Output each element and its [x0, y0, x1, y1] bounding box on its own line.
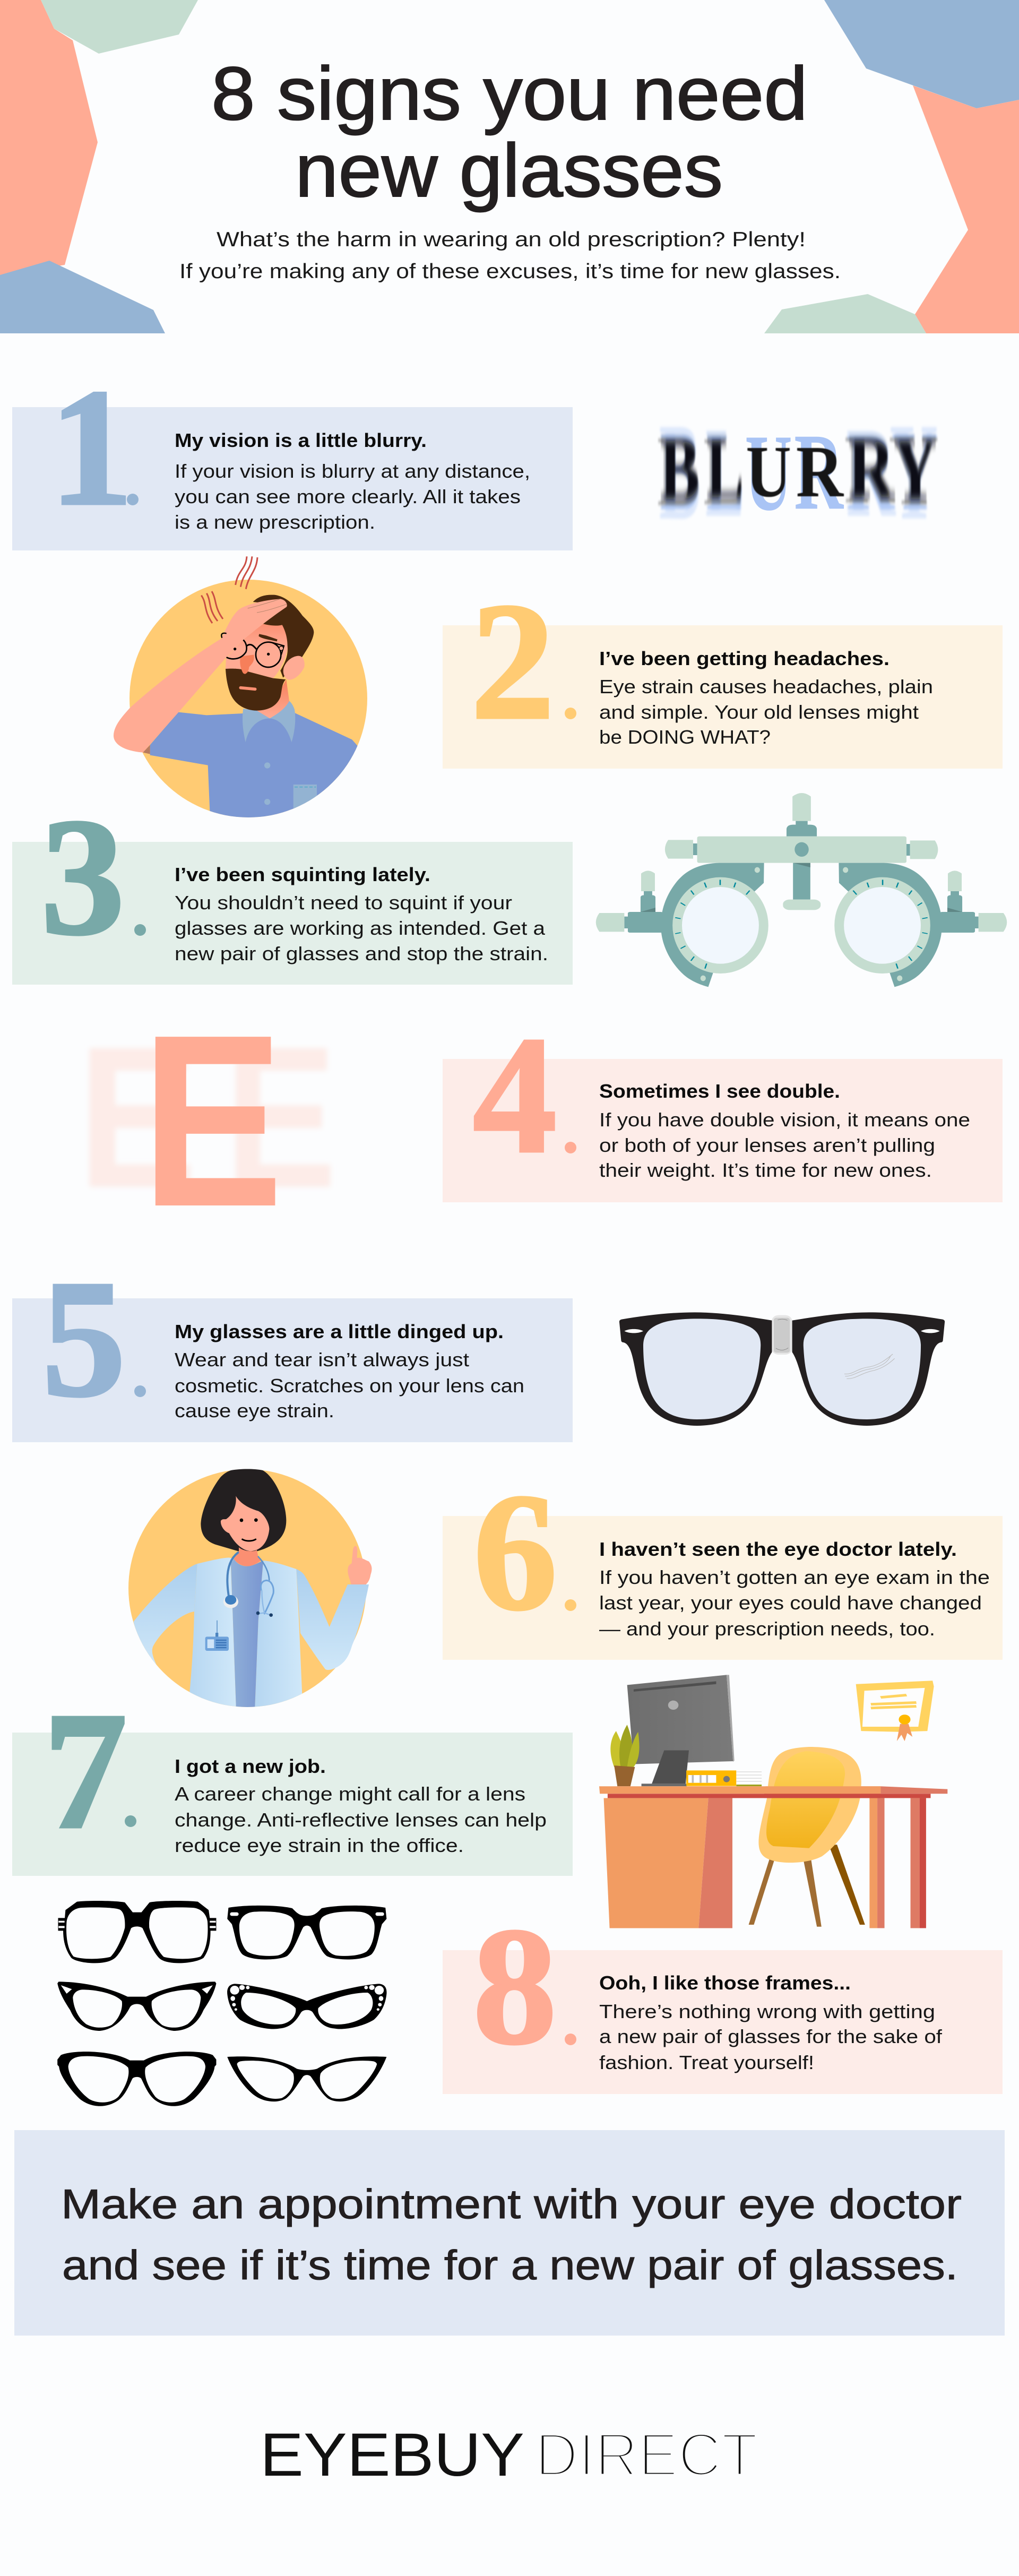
title: new glasses	[295, 128, 723, 213]
illustration: six eyeglass frames	[57, 1901, 387, 2106]
yellow circle	[129, 580, 367, 817]
text 1	[175, 429, 530, 533]
number 2: 2	[471, 568, 555, 754]
text 6: If you haven’t gotten an eye exam in the	[599, 1566, 990, 1588]
icon: scratch	[844, 1354, 895, 1379]
logo	[260, 2421, 758, 2489]
illustration: blurry text: R	[844, 415, 895, 524]
desk	[599, 1786, 947, 1928]
header	[0, 0, 1019, 333]
panel 2: headaches	[443, 568, 1003, 769]
illustration: blurry text: R	[796, 431, 844, 513]
monitor	[627, 1675, 735, 1786]
panel 4: double vision	[443, 1002, 1003, 1202]
text 5: cause eye strain.	[175, 1400, 334, 1421]
illustration: blurry text: B	[660, 408, 700, 535]
illustration: phoropter	[596, 793, 1007, 987]
illustration: blurry text: B	[659, 394, 701, 549]
illustration: blurry text: R	[794, 411, 844, 532]
illustration: blurry text: U	[746, 431, 791, 513]
frame 1	[58, 1901, 216, 1963]
number 1: 1	[49, 355, 133, 540]
number 3: 3	[41, 784, 125, 970]
text 8: fashion. Treat yourself!	[599, 2052, 814, 2073]
text 2: be DOING WHAT?	[599, 726, 771, 748]
text 3: You shouldn’t need to squint if your	[175, 892, 512, 914]
call to action text: Make an appointment with your eye doctor	[61, 2181, 962, 2227]
number 8: 8	[473, 1893, 557, 2079]
illustration: blurry text: R	[846, 409, 895, 535]
illustration: office desk	[599, 1675, 947, 1928]
text 4	[599, 1080, 970, 1181]
logo: EYEBUY	[260, 2421, 524, 2489]
text 6	[599, 1538, 990, 1640]
panel 1: blurry vision	[12, 355, 573, 550]
illustration: blurry text: L	[706, 420, 744, 516]
frame 3	[57, 1981, 216, 2031]
text 2: I’ve been getting headaches.	[599, 648, 890, 669]
text 3: I’ve been squinting lately.	[175, 864, 430, 885]
frame 6	[227, 2056, 386, 2101]
illustration: blurry text: R	[846, 401, 896, 544]
text 7: A career change might call for a lens	[175, 1783, 525, 1805]
text 6: I haven’t seen the eye doctor lately.	[599, 1538, 957, 1560]
subtitle	[179, 228, 841, 283]
illustration: man with headache	[114, 556, 372, 828]
call to action panel	[14, 2130, 1005, 2336]
panel 6: eye doctor	[443, 1459, 1003, 1660]
illustration: blurry text: L	[705, 401, 744, 544]
text 8: There’s nothing wrong with getting	[599, 2001, 935, 2022]
header decorative shapes	[0, 0, 1019, 333]
text 2: and simple. Your old lenses might	[599, 701, 919, 723]
frame 4	[227, 1984, 387, 2029]
text 7: reduce eye strain in the office.	[175, 1834, 464, 1856]
text 4: their weight. It’s time for new ones.	[599, 1159, 932, 1181]
illustration: double vision E: E	[141, 984, 283, 1257]
illustration: blurry text: L	[706, 409, 744, 535]
text: Y	[890, 394, 938, 549]
illustration: blurry text: Y	[888, 414, 939, 527]
text 3	[175, 864, 548, 964]
text 8: Ooh, I like those frames...	[599, 1972, 851, 1994]
text 3: glasses are working as intended. Get a	[175, 917, 546, 939]
text 4: Sometimes I see double.	[599, 1080, 840, 1102]
chair	[758, 1747, 880, 1863]
panel 5: dinged up	[12, 1246, 573, 1442]
text 2: Eye strain causes headaches, plain	[599, 676, 933, 697]
text 1: is a new prescription.	[175, 511, 375, 533]
illustration: blurry text: U	[745, 412, 792, 533]
icon: pain marks	[201, 556, 257, 623]
logo: DIRECT	[535, 2421, 758, 2489]
text 2	[599, 648, 933, 748]
subtitle: If you’re making any of these excuses, it’s time for new glasses.	[179, 260, 841, 283]
title	[211, 51, 808, 213]
illustration: blurry text: L	[703, 417, 744, 526]
illustration: blurry text	[657, 394, 939, 549]
text 3: new pair of glasses and stop the strain.	[175, 943, 548, 964]
icon: eyeglasses on man	[221, 633, 284, 667]
text 1: My vision is a little blurry.	[175, 429, 427, 451]
illustration: double vision E	[77, 984, 337, 1257]
illustration: blurry text: Y	[893, 420, 937, 518]
title: 8 signs you need	[211, 51, 808, 136]
panel 8: frames	[443, 1893, 1003, 2094]
number 5: 5	[42, 1246, 126, 1432]
number 4: 4	[473, 1002, 557, 1188]
subtitle: What’s the harm in wearing an old prescription? Plenty!	[217, 228, 806, 251]
text 8	[599, 1972, 943, 2073]
text 5: Wear and tear isn’t always just	[175, 1349, 469, 1371]
panel 7: new job	[12, 1678, 573, 1876]
text 7: change. Anti-reflective lenses can help	[175, 1809, 547, 1831]
text 7	[175, 1755, 547, 1856]
illustration: blurry text: B	[660, 420, 700, 518]
certificate	[856, 1681, 934, 1741]
plant	[610, 1725, 640, 1786]
text 7: I got a new job.	[175, 1755, 326, 1777]
text 4: or both of your lenses aren’t pulling	[599, 1134, 935, 1156]
icon: stethoscope	[227, 1553, 273, 1615]
text 5	[175, 1321, 524, 1421]
illustration: scratched glasses	[619, 1312, 945, 1426]
illustration: double vision E: E	[77, 1005, 197, 1230]
text 5: cosmetic. Scratches on your lens can	[175, 1375, 524, 1397]
text 1: If your vision is blurry at any distance,	[175, 460, 530, 482]
text 6: last year, your eyes could have changed	[599, 1592, 982, 1614]
panel 3: squinting	[12, 784, 573, 985]
illustration: blurry text: B	[657, 415, 701, 528]
illustration: blurry text: Y	[892, 408, 938, 535]
text 8: a new pair of glasses for the sake of	[599, 2026, 943, 2047]
illustration: double vision E: E	[224, 1005, 337, 1230]
frame 2	[227, 1906, 386, 1959]
text 6: — and your prescription needs, too.	[599, 1618, 935, 1640]
text 4: If you have double vision, it means one	[599, 1109, 970, 1131]
number 6: 6	[473, 1459, 557, 1645]
number 7: 7	[44, 1678, 127, 1864]
yellow circle	[128, 1469, 366, 1707]
icon: id badge	[205, 1621, 229, 1651]
text 1: you can see more clearly. All it takes	[175, 486, 521, 507]
illustration: blurry text: R	[848, 420, 895, 516]
binders	[686, 1770, 762, 1786]
chair legs	[749, 1845, 865, 1927]
frame 5	[57, 2052, 216, 2106]
illustration: doctor	[128, 1469, 372, 1711]
text 5: My glasses are a little dinged up.	[175, 1321, 504, 1342]
call to action text	[61, 2181, 962, 2288]
call to action text: and see if it’s time for a new pair of glasses.	[62, 2242, 958, 2288]
